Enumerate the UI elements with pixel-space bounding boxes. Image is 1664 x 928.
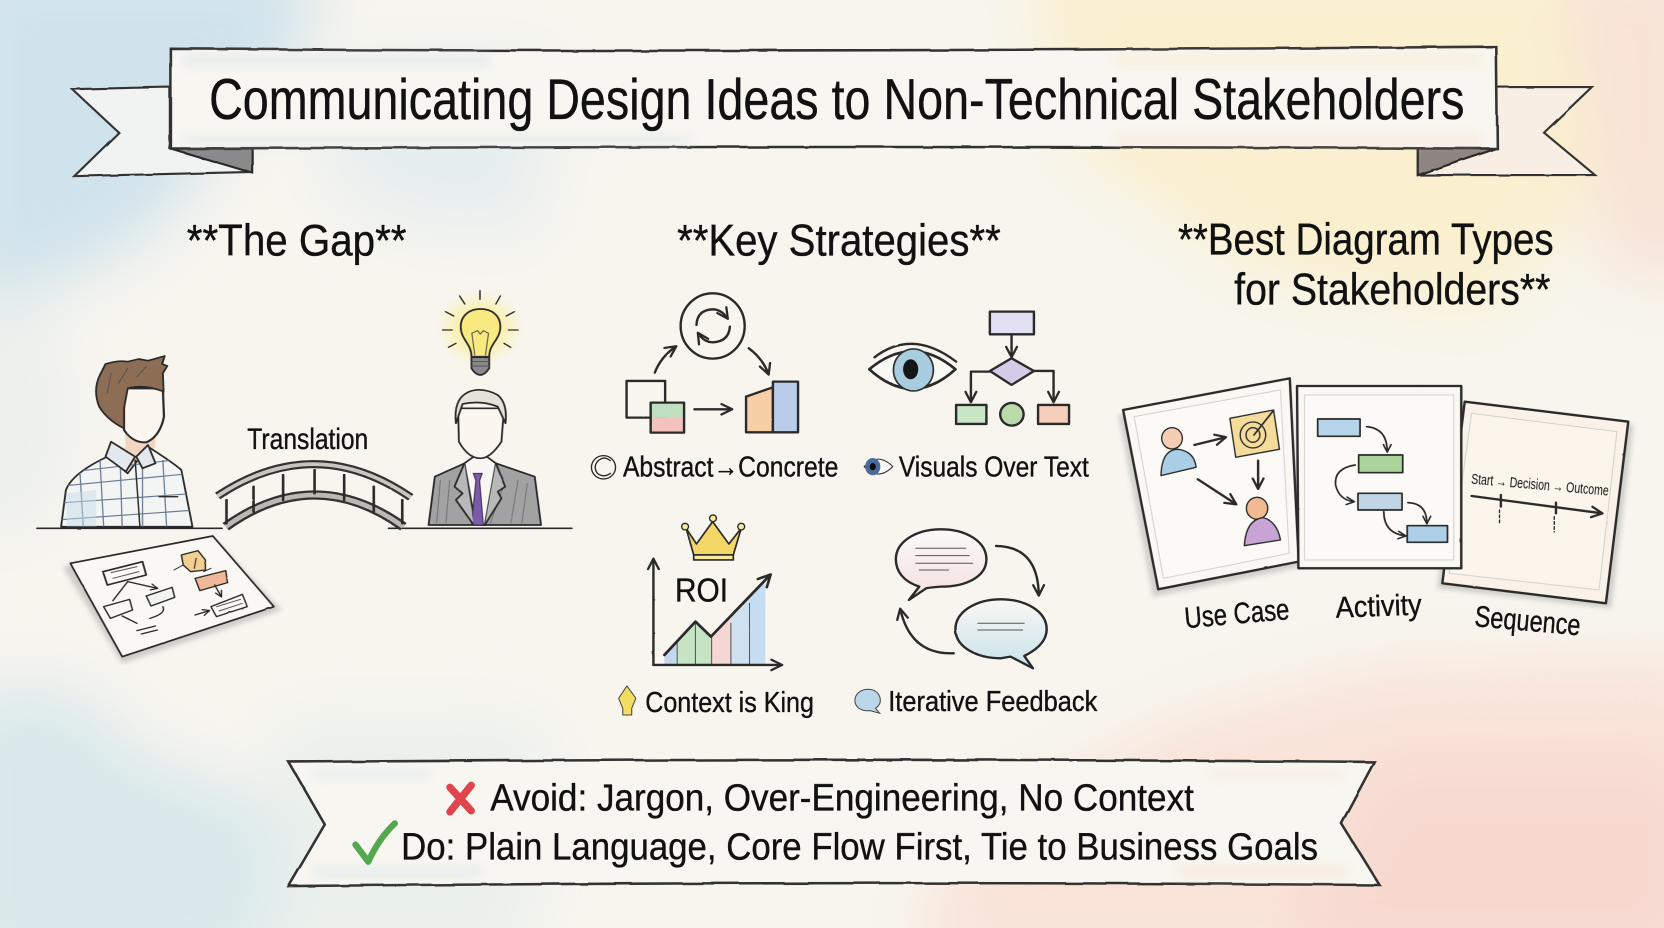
icon: red cross — [450, 785, 471, 812]
avoid line: Avoid: Jargon, Over-Engineering, No Context — [490, 777, 1194, 820]
stakeholder figure — [429, 390, 541, 525]
label: iterative feedback: Iterative Feedback — [888, 686, 1098, 718]
panel: diagram type papers — [1119, 378, 1633, 608]
title banner — [72, 47, 1595, 176]
left fold — [171, 149, 253, 173]
icon: small eye — [864, 458, 893, 475]
paper: sequence — [1437, 402, 1633, 608]
icon: small yellow bulb — [619, 686, 636, 715]
left ribbon tail — [72, 87, 253, 176]
icon: crown — [682, 515, 745, 560]
label: roi: ROI — [675, 572, 728, 609]
icon: eye and flowchart — [869, 312, 1069, 426]
developer figure — [56, 356, 196, 527]
chart: roi growth — [653, 559, 782, 665]
icon: feedback speech bubbles — [896, 529, 1047, 668]
heading: best diagram types: for Stakeholders** — [1234, 266, 1550, 315]
paper: use case — [1119, 378, 1303, 597]
panel: key strategies icons — [591, 293, 1069, 715]
heading: the gap: **The Gap** — [187, 217, 406, 266]
do line: Do: Plain Language, Core Flow First, Tie to Business Goals — [401, 826, 1318, 869]
banner body — [171, 47, 1497, 149]
ground line — [37, 526, 572, 531]
right fold — [1418, 149, 1496, 175]
bridge — [218, 464, 411, 527]
icon: small concentric c — [591, 456, 616, 479]
whiteboard sketch paper — [63, 536, 281, 663]
heading: best diagram types: **Best Diagram Types — [1178, 216, 1554, 265]
paper: activity — [1297, 386, 1461, 568]
heading: key strategies: **Key Strategies** — [677, 217, 1001, 266]
right ribbon tail — [1418, 87, 1595, 175]
label: use case: Use Case — [1183, 593, 1291, 635]
label: abstract to concrete: Abstract→Concrete — [623, 451, 838, 483]
label: sequence: Sequence — [1473, 600, 1582, 642]
label: start decision outcome: Start → Decision → Outcome — [1470, 472, 1609, 500]
light bulb — [436, 290, 524, 375]
icon: green check — [356, 823, 395, 862]
panel: the gap illustration — [37, 290, 572, 663]
label: context is king: Context is King — [645, 687, 814, 719]
label: visuals over text: Visuals Over Text — [899, 451, 1089, 483]
label: translation: Translation — [247, 423, 368, 456]
heading: best diagram types — [1178, 216, 1554, 315]
icon: abstract to concrete — [627, 293, 798, 433]
label: activity: Activity — [1335, 589, 1422, 625]
icon: small blue bubble — [855, 689, 880, 713]
banner washes — [313, 770, 1348, 877]
banner colour washes — [183, 55, 1480, 143]
bottom banner — [289, 760, 1380, 886]
